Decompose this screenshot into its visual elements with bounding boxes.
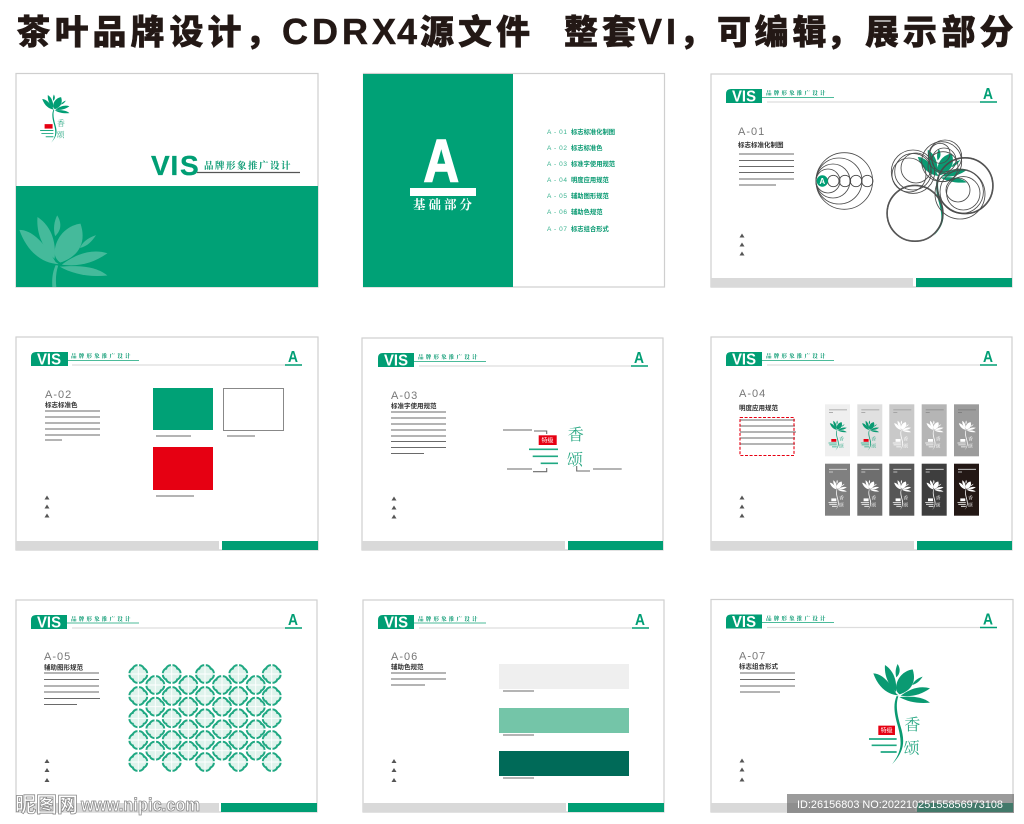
thumbnail 10 [954, 464, 979, 516]
bottom bar [711, 278, 1012, 287]
brightness thumbnails [825, 404, 979, 516]
triangles [44, 496, 50, 518]
contents list: A - 06 [547, 209, 568, 216]
thumbnail 5 [954, 404, 979, 456]
bottom bar [362, 541, 663, 550]
logo wordmark with dimension marks: 颂 [567, 447, 584, 470]
logo wordmark with dimension marks: 特级 [542, 436, 554, 444]
cover subtitle: 品牌形象推广设计 [204, 158, 292, 172]
header [726, 349, 997, 368]
section subtitle: 明度应用规范 [739, 403, 778, 412]
title: ，可编辑，展示部分 [679, 14, 1014, 52]
panel: A-07 [711, 600, 1013, 812]
title: CDR [282, 11, 368, 52]
header: A [288, 612, 298, 629]
header [31, 349, 302, 368]
header: 品牌形象推广设计 [71, 615, 133, 623]
header: VIS [37, 352, 61, 368]
thumbnail 5: 颂 [968, 442, 973, 449]
contents list: A - 03 [547, 161, 568, 168]
thumbnail 9: 颂 [936, 502, 941, 509]
contents list: A - 04 [547, 177, 568, 184]
section label: A-04 [739, 388, 766, 400]
text lines [391, 412, 446, 454]
contents list: 明度应用规范 [571, 175, 609, 184]
header: 品牌形象推广设计 [418, 615, 480, 623]
section subtitle: 标志标准化制图 [738, 140, 784, 149]
logo: lotus with wordmark [869, 664, 930, 764]
chart: lotus construction circles [887, 140, 993, 242]
panel: A-02 [16, 337, 318, 550]
swatch: green [153, 388, 213, 430]
thumbnail 1: 颂 [839, 442, 844, 449]
contents list: 标准字使用规范 [571, 159, 616, 168]
logo wordmark with dimension marks: 香 [568, 422, 584, 445]
header: A [288, 349, 298, 366]
contents list: A - 07 [547, 226, 568, 233]
panel: A-06 [363, 600, 664, 812]
thumbnail 10: 香 [968, 495, 973, 502]
header: 品牌形象推广设计 [766, 614, 828, 622]
thumbnail 7 [857, 464, 882, 516]
watermark: image id: ID:26156803 NO:20221025155856973108 [797, 799, 1003, 811]
title: 茶叶品牌设计， [16, 14, 279, 52]
thumbnail 3: 香 [903, 435, 908, 442]
logo: lotus with wordmark: 颂 [904, 735, 920, 758]
triangles [44, 759, 50, 782]
swatch: dark green [499, 751, 629, 776]
thumbnail 6: 颂 [839, 502, 844, 509]
icon: ghost lotus [20, 216, 108, 287]
section label: A-02 [45, 389, 72, 401]
header [378, 612, 649, 632]
VIS heading: VIS [151, 150, 199, 181]
logo: small lotus [40, 95, 69, 143]
triangles [392, 759, 396, 782]
logo: lotus with wordmark: 香 [904, 712, 920, 735]
title: 整套 [564, 14, 636, 52]
header: VIS [384, 352, 408, 370]
header: A [983, 86, 993, 103]
contents list [547, 127, 616, 233]
section name: 基础部分 [413, 195, 475, 213]
thumbnail 8: 香 [903, 495, 908, 502]
section label: A-06 [391, 651, 418, 663]
swatch: red [153, 447, 213, 490]
thumbnail 9: 香 [936, 495, 941, 502]
thumbnail 9 [922, 464, 947, 516]
panel: A-03 [362, 338, 663, 550]
chart: letter construction circles: A [819, 177, 825, 186]
header: A [634, 350, 644, 367]
big letter A: A [424, 127, 459, 195]
watermark: site logo [15, 794, 200, 817]
pattern: quatrefoil tiles [129, 665, 281, 771]
thumbnail 6: 香 [839, 495, 844, 502]
title: 源文件 [420, 13, 530, 52]
header [726, 612, 997, 631]
text lines [391, 673, 446, 685]
thumbnail 1 [825, 404, 850, 456]
header: 品牌形象推广设计 [71, 352, 133, 360]
header [31, 612, 302, 632]
thumbnail 2 [857, 404, 882, 456]
thumbnail 5: 香 [968, 435, 973, 442]
contents green block [363, 74, 513, 287]
swatch: mint [499, 708, 629, 733]
header: 品牌形象推广设计 [766, 352, 828, 360]
panel: A-04 [711, 337, 1012, 550]
thumbnail 4 [922, 404, 947, 456]
text lines [740, 420, 796, 444]
swatch: outline [224, 388, 284, 430]
text lines [740, 673, 795, 692]
bottom bar [363, 803, 664, 812]
thumbnail 2: 颂 [871, 442, 876, 449]
panel: VIS cover [15, 72, 319, 288]
logo: small lotus: 香 [57, 118, 65, 129]
thumbnail 8: 颂 [903, 502, 908, 509]
panel: A-05 [16, 600, 317, 812]
section label: A-03 [391, 390, 418, 402]
thumbnail 2: 香 [871, 435, 876, 442]
title: VI [638, 11, 676, 52]
logo wordmark with dimension marks [503, 422, 622, 472]
header: VIS [37, 614, 61, 632]
section label: A-01 [738, 126, 765, 138]
bottom bar [711, 541, 1012, 550]
contents list: 标志标准色 [571, 143, 603, 152]
watermark: site logo: www.nipic.com [80, 795, 200, 815]
triangles [740, 234, 744, 256]
header: 品牌形象推广设计 [418, 353, 480, 361]
bottom bar [16, 803, 317, 812]
header [378, 350, 648, 370]
watermark: site logo: 昵图网 [15, 794, 78, 817]
header: A [635, 612, 645, 629]
header: VIS [732, 88, 756, 106]
thumbnail 4: 香 [936, 435, 941, 442]
contents list: 辅助图形规范 [571, 191, 609, 200]
bottom bar [16, 541, 318, 550]
title: X4 [372, 11, 417, 52]
thumbnail 6 [825, 464, 850, 516]
contents list: A - 05 [547, 193, 568, 200]
triangles [392, 496, 396, 518]
triangles [740, 758, 744, 782]
triangles [740, 496, 744, 518]
swatch: light gray [499, 664, 629, 689]
logo: small lotus: 颂 [57, 129, 65, 140]
section subtitle: 标志标准色 [45, 400, 78, 409]
panel: A-01 [711, 74, 1012, 287]
thumbnail 10: 颂 [968, 502, 973, 509]
section subtitle: 标志组合形式 [739, 662, 778, 670]
contents list: 标志标准化制图 [571, 127, 615, 136]
dashed red frame [740, 418, 794, 456]
header [726, 86, 997, 106]
header: VIS [732, 614, 756, 631]
text lines [739, 154, 794, 185]
cover green band [16, 186, 318, 287]
header: 品牌形象推广设计 [766, 89, 828, 97]
thumbnail 7: 香 [871, 495, 876, 502]
contents list: A - 02 [547, 145, 568, 152]
thumbnail 1: 香 [839, 435, 844, 442]
header: VIS [384, 614, 408, 632]
header: VIS [732, 352, 756, 368]
contents list: 标志组合形式 [571, 224, 609, 233]
header: A [983, 612, 993, 628]
section subtitle: 标准字使用规范 [391, 401, 437, 410]
panel: contents [363, 74, 664, 287]
thumbnail 7: 颂 [871, 502, 876, 509]
contents list: A - 01 [547, 129, 568, 136]
section subtitle: 辅助图形规范 [44, 662, 84, 672]
text lines [44, 673, 100, 704]
section subtitle: 辅助色规范 [391, 662, 424, 671]
header: A [983, 349, 993, 366]
thumbnail 8 [889, 464, 914, 516]
thumbnail 3: 颂 [903, 442, 908, 449]
watermark: image id [787, 794, 1014, 813]
thumbnail 3 [889, 404, 914, 456]
thumbnail 4: 颂 [936, 442, 941, 449]
logo: lotus with wordmark: 特级 [881, 726, 893, 734]
chart: letter construction circles [816, 153, 873, 209]
section label: A-07 [739, 650, 766, 662]
contents list: 辅助色规范 [571, 207, 603, 216]
section label: A-05 [44, 651, 71, 663]
text lines [45, 411, 100, 440]
bottom bar [711, 803, 1013, 812]
